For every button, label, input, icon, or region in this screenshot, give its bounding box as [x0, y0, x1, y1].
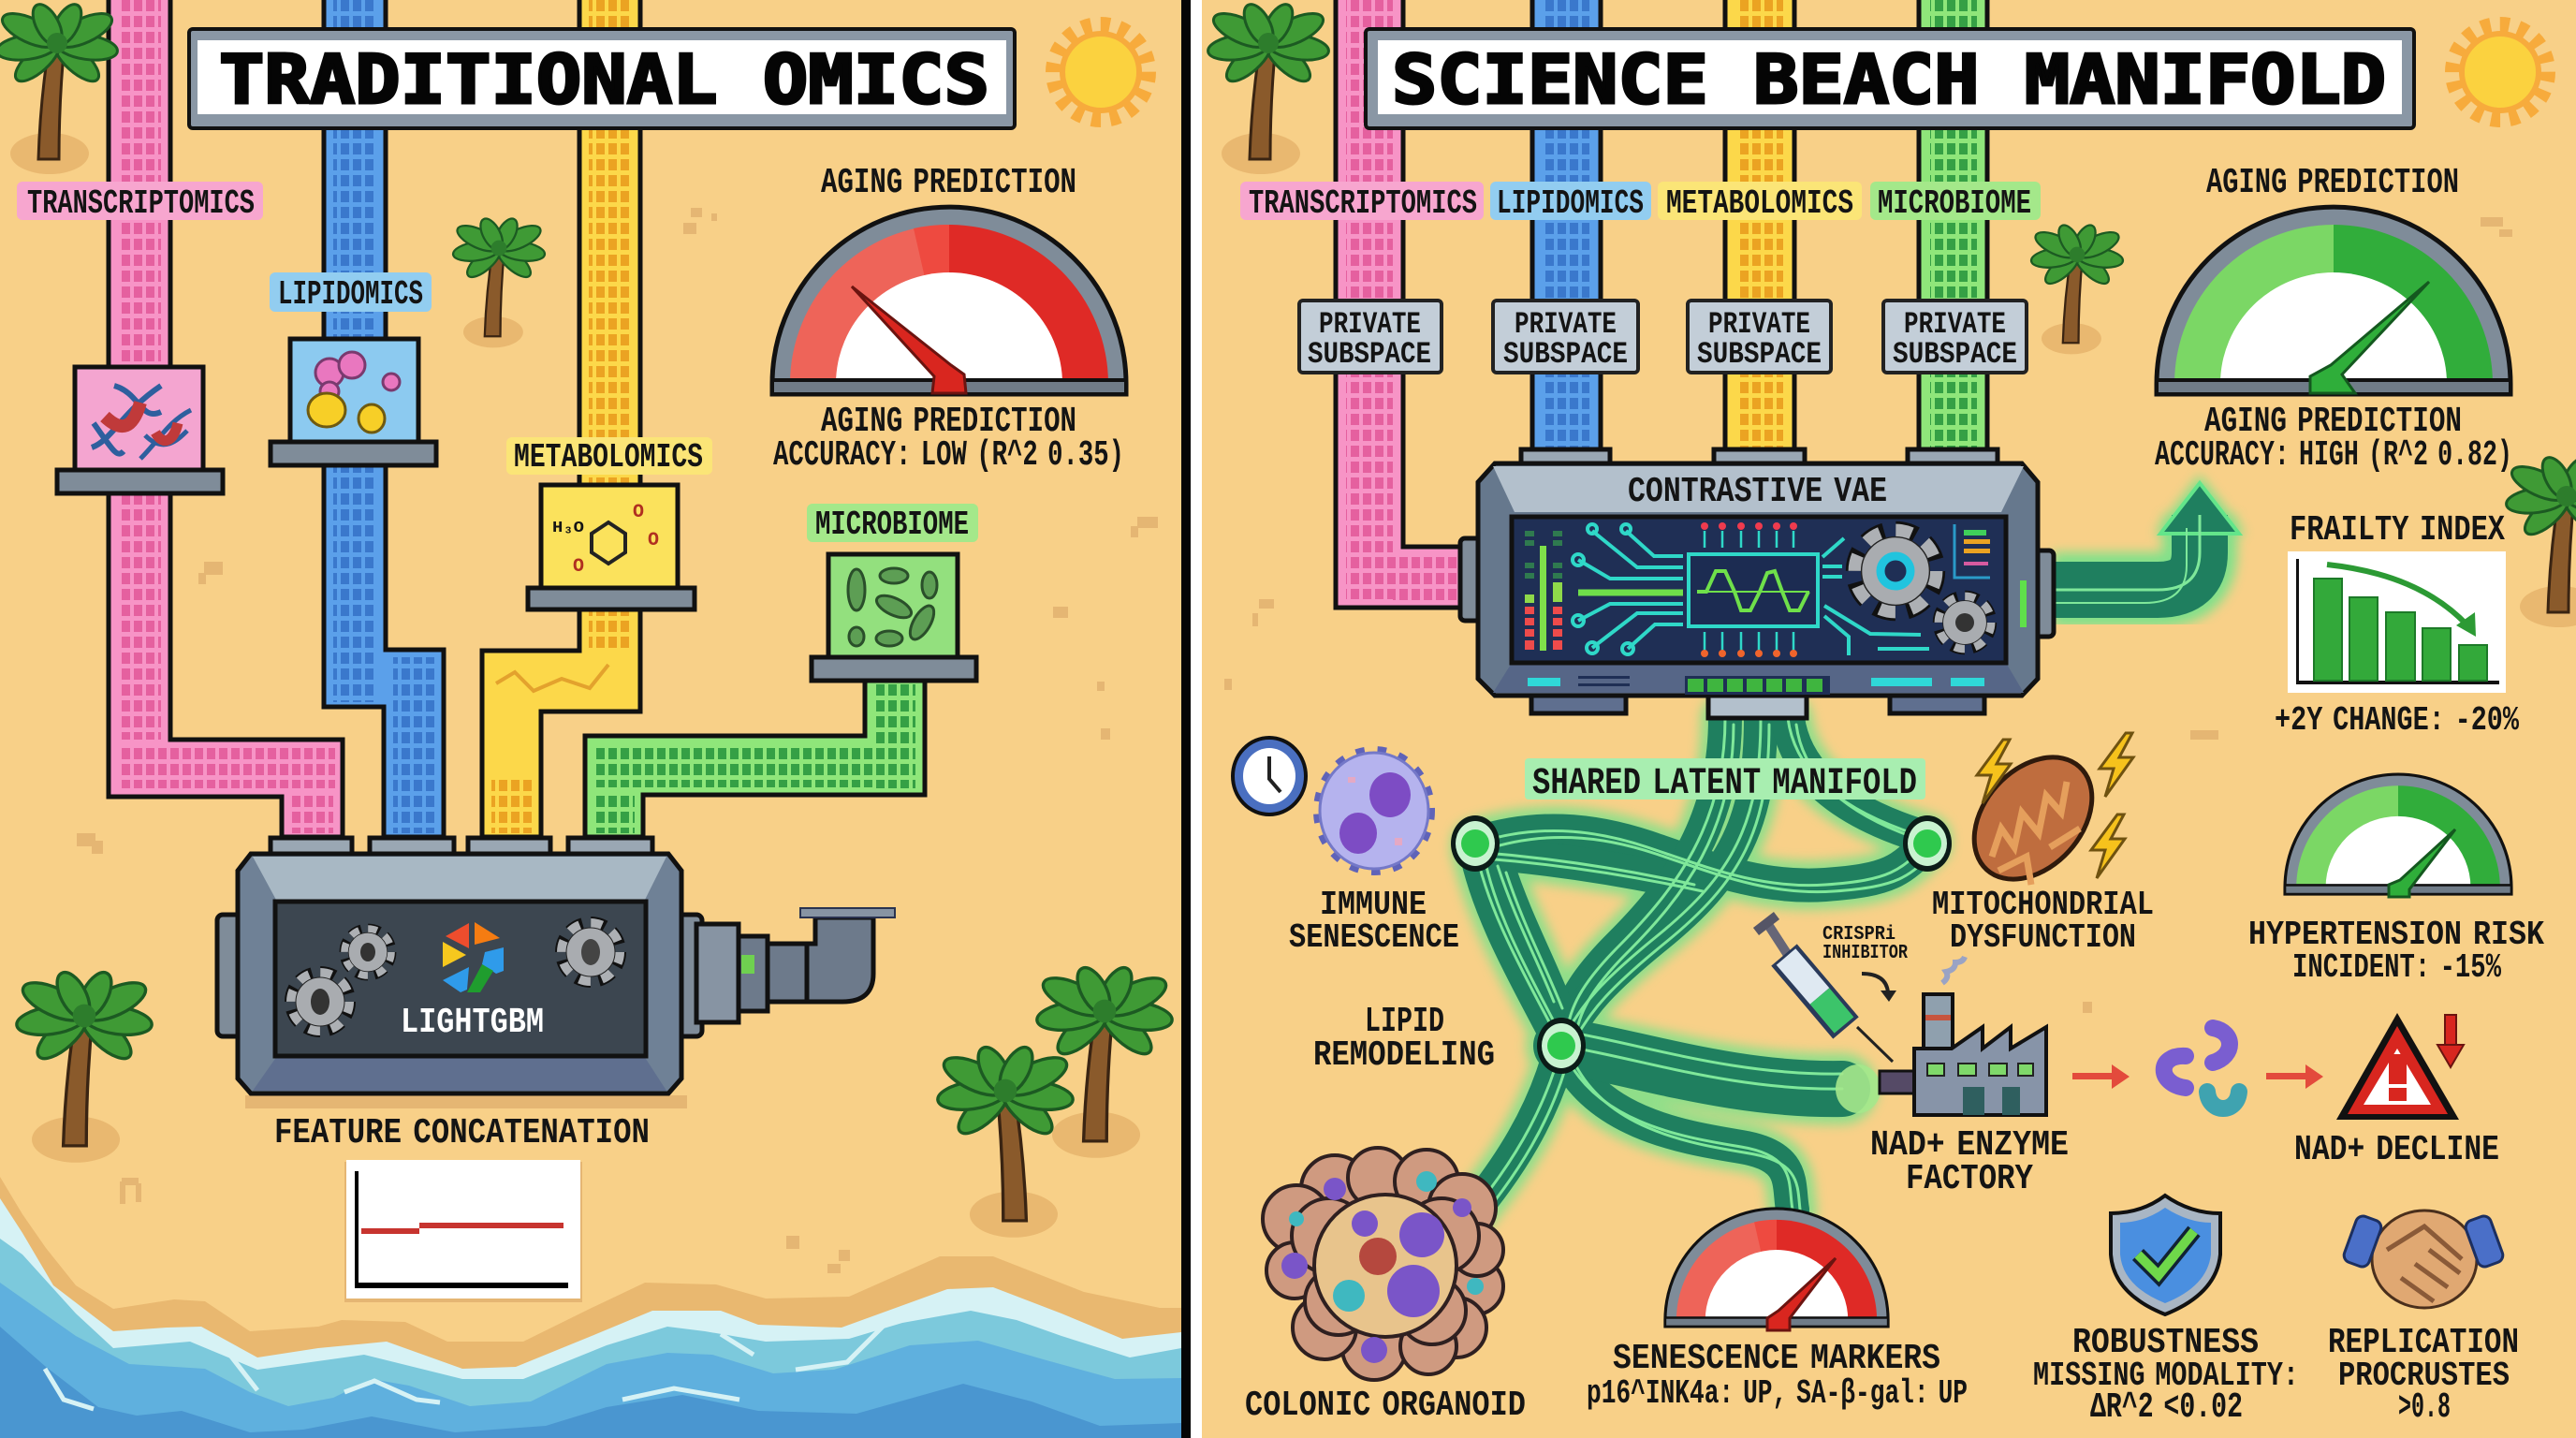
- caption: robustness: ΔR^2 <0.02: [2090, 1387, 2243, 1428]
- caption: lipid remodeling: REMODELING: [1313, 1035, 1495, 1076]
- caption: replication: REPLICATION: [2328, 1323, 2519, 1363]
- sand specks: [1224, 217, 2512, 1013]
- sand specks: [77, 208, 1158, 1273]
- caption: feature concatenation: FEATURE CONCATENATION: [274, 1113, 650, 1153]
- caption: robustness: MISSING MODALITY:: [2033, 1357, 2299, 1395]
- data pipe: transcriptomics: [1336, 0, 1465, 608]
- data pipe: lipidomics: [324, 0, 444, 837]
- machine: lightgbm: [217, 838, 895, 1108]
- label: lipidomics: LIPIDOMICS: [1497, 184, 1644, 223]
- icon: dna box: [57, 367, 223, 493]
- arrow: enzymes to decline: [2266, 1064, 2323, 1089]
- caption: immune senescence: SENESCENCE: [1289, 918, 1459, 957]
- palm tree: top left: [1207, 0, 1330, 174]
- sun: [2455, 27, 2545, 117]
- icon: lipid box: [271, 339, 436, 465]
- vae level meters: [1525, 531, 1562, 651]
- machine: contrastive vae: [1460, 449, 2054, 718]
- arrow: inhibitor to factory: [1862, 974, 1896, 1002]
- caption: robustness: [2033, 1323, 2299, 1428]
- box: private subspace 2: PRIVATE: [1515, 307, 1617, 342]
- label: transcriptomics: TRANSCRIPTOMICS: [1249, 184, 1477, 223]
- caption: lipid remodeling: [1313, 1002, 1495, 1076]
- palm tree: lower left: [15, 967, 154, 1163]
- label: lipidomics: LIPIDOMICS: [278, 275, 423, 314]
- manifold node: immune: [1451, 815, 1500, 872]
- label: metabolomics: METABOLOMICS: [1666, 184, 1853, 223]
- heading: aging prediction: AGING PREDICTION: [2206, 163, 2459, 203]
- label: crispri inhibitor: INHIBITOR: [1822, 943, 1908, 964]
- title: traditional omics: [189, 29, 1015, 128]
- box: private subspace 3: PRIVATE: [1708, 307, 1810, 342]
- panel: traditional omics: [0, 0, 1181, 1438]
- enzyme spray: [1836, 1064, 1881, 1113]
- caption: mitochondrial dysfunction: DYSFUNCTION: [1950, 918, 2136, 957]
- chart: frailty index bars: [2288, 551, 2506, 693]
- vae legend bars: [1954, 524, 1990, 578]
- box: private subspace 1: PRIVATE: [1319, 307, 1421, 342]
- icon: handshake: [2342, 1211, 2505, 1308]
- box: private subspace 4: PRIVATE: [1904, 307, 2006, 342]
- caption: replication: >0.8: [2398, 1387, 2451, 1428]
- icon: immune senescent cell: [1320, 753, 1428, 869]
- data pipe: transcriptomics: [109, 0, 343, 837]
- icon: metabolite box: [528, 485, 695, 609]
- palm tree: top left: [0, 0, 119, 174]
- caption: nad+ decline: NAD+ DECLINE: [2294, 1130, 2499, 1170]
- label: lipidomics: [270, 272, 432, 314]
- label: shared latent manifold: SHARED LATENT MANIFOLD: [1532, 763, 1917, 805]
- caption: hypertension risk: INCIDENT: -15%: [2292, 948, 2501, 987]
- caption: replication: PROCRUSTES: [2338, 1357, 2510, 1395]
- ocean shoreline: [0, 1177, 1181, 1438]
- caption: aging prediction accuracy low: [773, 402, 1124, 476]
- manifold node: mitochondrial: [1903, 815, 1952, 872]
- caption: mitochondrial dysfunction: MITOCHONDRIAL: [1932, 886, 2154, 924]
- icon: metabolite box: O: [573, 556, 584, 578]
- title: science beach manifold: [1366, 29, 2414, 128]
- icon: lightning bolt 2: [2100, 733, 2133, 797]
- title: traditional omics: TRADITIONAL OMICS: [219, 40, 989, 119]
- sun: [1056, 27, 1146, 117]
- icon: warning triangle: [2336, 1013, 2459, 1120]
- gauge: hypertension risk: [2285, 774, 2511, 897]
- caption: lipid remodeling: LIPID: [1365, 1002, 1444, 1042]
- caption: senescence markers: [1587, 1339, 1968, 1413]
- title: science beach manifold: SCIENCE BEACH MANIFOLD: [1392, 40, 2386, 119]
- box: private subspace 4: [1883, 301, 2027, 373]
- icon: syringe: [1756, 916, 1893, 1062]
- arrow: factory to enzymes: [2072, 1064, 2130, 1089]
- vae status panel: [1528, 580, 2027, 695]
- caption: nad+ enzyme factory: FACTORY: [1906, 1159, 2033, 1199]
- caption: aging prediction accuracy low: AGING PREDICTION: [821, 402, 1076, 442]
- icon: nad+ enzyme factory: [1880, 957, 2046, 1115]
- caption: immune senescence: IMMUNE: [1320, 886, 1427, 924]
- icon: enzymes: [2164, 1028, 2239, 1108]
- vae gears: [1856, 532, 1990, 648]
- caption: senescence markers: SENESCENCE MARKERS: [1613, 1339, 1940, 1379]
- palm tree: centre: [452, 215, 546, 347]
- caption: aging prediction accuracy high: [2155, 402, 2512, 476]
- palm tree: right edge: [2505, 453, 2576, 627]
- icon: clock: [1233, 738, 1306, 814]
- icon: shield: [2111, 1196, 2220, 1314]
- heading: contrastive vae: CONTRASTIVE VAE: [1628, 472, 1887, 512]
- gauge: senescence markers: [1665, 1209, 1888, 1330]
- data pipe: metabolomics: [482, 0, 640, 837]
- palm tree: lower right back: [1035, 962, 1174, 1158]
- box: private subspace 1: [1299, 301, 1442, 373]
- data pipe: microbiome: [585, 674, 925, 837]
- box: private subspace 2: [1493, 301, 1638, 373]
- gauge: aging prediction low: [772, 207, 1126, 394]
- gauge: aging prediction high: [2157, 207, 2510, 394]
- caption: mitochondrial dysfunction: [1932, 886, 2154, 957]
- data pipe: microbiome: [1919, 0, 1987, 454]
- palm tree: centre: [2030, 222, 2124, 354]
- data pipe: metabolomics: [1725, 0, 1794, 454]
- chart: flat performance line: [344, 1160, 582, 1302]
- caption: robustness: ROBUSTNESS: [2072, 1323, 2259, 1363]
- vae waveform chip: [1689, 522, 1818, 657]
- data pipe: lipidomics: [1532, 0, 1601, 454]
- caption: senescence markers: p16^INK4a: UP, SA-β-gal: UP: [1587, 1374, 1968, 1413]
- vae circuit traces: [1573, 524, 1929, 655]
- caption: colonic organoid: COLONIC ORGANOID: [1245, 1386, 1526, 1426]
- icon: microbiome box: [812, 554, 976, 681]
- icon: lightning bolt 3: [2091, 814, 2125, 878]
- label: microbiome: MICROBIOME: [815, 506, 969, 544]
- panel divider: [1181, 0, 1202, 1438]
- caption: frailty change: +2Y CHANGE: -20%: [2275, 701, 2519, 740]
- label: lightgbm: LIGHTGBM: [401, 1003, 544, 1043]
- box: private subspace 2: SUBSPACE: [1503, 337, 1628, 372]
- caption: hypertension risk: HYPERTENSION RISK: [2248, 916, 2544, 954]
- heading: frailty index: FRAILTY INDEX: [2290, 510, 2505, 550]
- caption: nad+ enzyme factory: [1870, 1125, 2069, 1199]
- caption: nad+ enzyme factory: NAD+ ENZYME: [1870, 1125, 2069, 1166]
- caption: aging prediction accuracy high: AGING PREDICTION: [2204, 402, 2462, 442]
- label: transcriptomics: TRANSCRIPTOMICS: [27, 184, 255, 223]
- icon: metabolite box: H₃O: [552, 520, 584, 537]
- shared latent manifold bands: [1470, 718, 1936, 1222]
- icon: down arrow: [2437, 1015, 2464, 1067]
- box: private subspace 1: SUBSPACE: [1308, 337, 1431, 372]
- box: private subspace 4: SUBSPACE: [1893, 337, 2017, 372]
- box: private subspace 3: SUBSPACE: [1697, 337, 1822, 372]
- palm tree: lower right front: [936, 1042, 1075, 1238]
- panel: science beach manifold: [1207, 0, 2576, 1428]
- box: private subspace 3: [1688, 301, 1831, 373]
- caption: replication: [2328, 1323, 2519, 1428]
- caption: aging prediction accuracy low: ACCURACY: LOW (R^2 0.35): [773, 435, 1124, 476]
- output stream arrow: [2040, 476, 2245, 603]
- manifold node: lipid: [1537, 1018, 1586, 1074]
- icon: mitochondrion: [1951, 734, 2115, 902]
- label: crispri inhibitor: [1822, 924, 1908, 964]
- icon: colonic organoid: [1263, 1148, 1503, 1380]
- label: microbiome: MICROBIOME: [1878, 184, 2031, 223]
- icon: metabolite box: O: [633, 502, 644, 523]
- label: crispri inhibitor: CRISPRi: [1822, 924, 1895, 946]
- caption: immune senescence: [1289, 886, 1459, 957]
- label: metabolomics: METABOLOMICS: [514, 438, 703, 477]
- heading: aging prediction: AGING PREDICTION: [821, 163, 1076, 203]
- icon: metabolite box: O: [648, 530, 659, 551]
- icon: lightgbm logo: [443, 922, 504, 992]
- icon: lightning bolt 1: [1977, 740, 2011, 803]
- caption: hypertension risk: [2248, 916, 2544, 987]
